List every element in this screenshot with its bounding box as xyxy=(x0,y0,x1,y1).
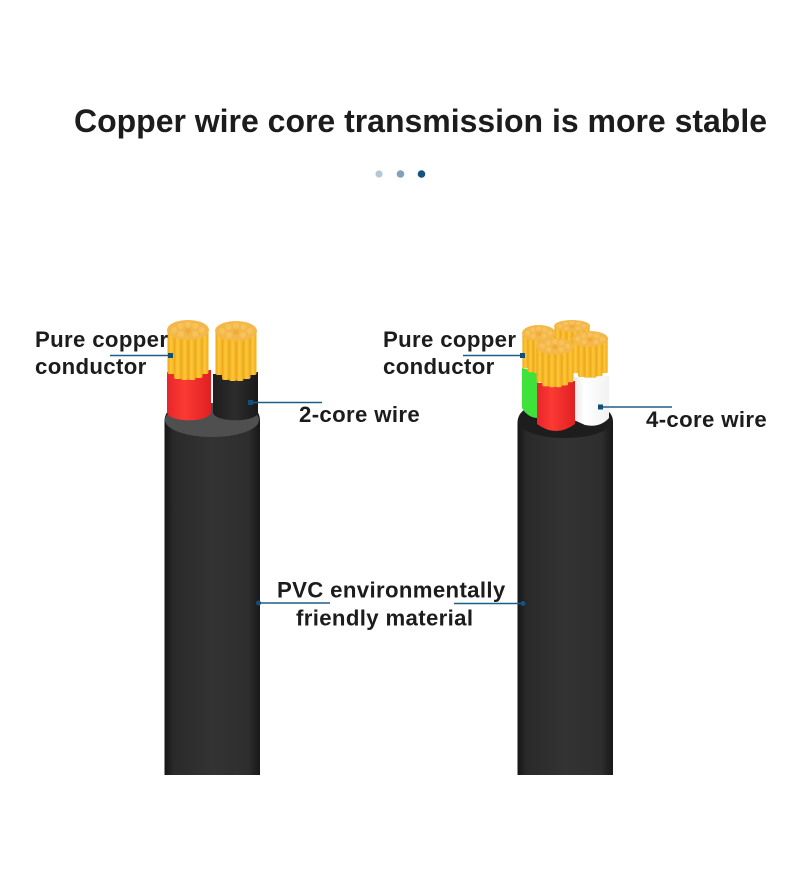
2-core cable xyxy=(164,320,260,775)
label: right pure copper conductor xyxy=(383,327,525,379)
label: left pure copper conductor: conductor xyxy=(35,354,147,379)
label: right pure copper conductor: Pure copper xyxy=(383,327,516,352)
label: 2-core wire: 2-core wire xyxy=(299,402,420,427)
label: 4-core wire xyxy=(598,404,767,432)
pagination dots xyxy=(375,170,425,178)
copper strands left xyxy=(167,320,209,380)
label: PVC environmentally friendly material xyxy=(256,578,526,630)
back copper xyxy=(554,320,590,356)
4-core cable xyxy=(518,320,613,775)
label: 2-core wire xyxy=(248,400,420,427)
copper strands right xyxy=(215,321,257,381)
jacket end cap xyxy=(165,403,259,437)
red core xyxy=(167,370,211,420)
cable jacket xyxy=(164,404,260,775)
title: Copper wire core transmission is more stable xyxy=(74,103,767,139)
white core xyxy=(574,376,609,426)
jacket end cap xyxy=(518,404,612,438)
copper strands green core xyxy=(522,325,556,373)
label: left pure copper conductor xyxy=(35,327,173,379)
label: 4-core wire: 4-core wire xyxy=(646,407,767,432)
label: PVC environmentally friendly material: friendly material xyxy=(296,606,473,630)
green core xyxy=(522,368,538,418)
red core xyxy=(537,381,575,431)
label: left pure copper conductor: Pure copper xyxy=(35,327,168,352)
label: PVC environmentally friendly material: PVC environmentally xyxy=(277,578,506,602)
black core xyxy=(213,372,258,420)
copper strands white core xyxy=(572,331,608,378)
copper strands red core xyxy=(536,338,574,387)
cable jacket xyxy=(518,406,613,775)
label: right pure copper conductor: conductor xyxy=(383,354,495,379)
